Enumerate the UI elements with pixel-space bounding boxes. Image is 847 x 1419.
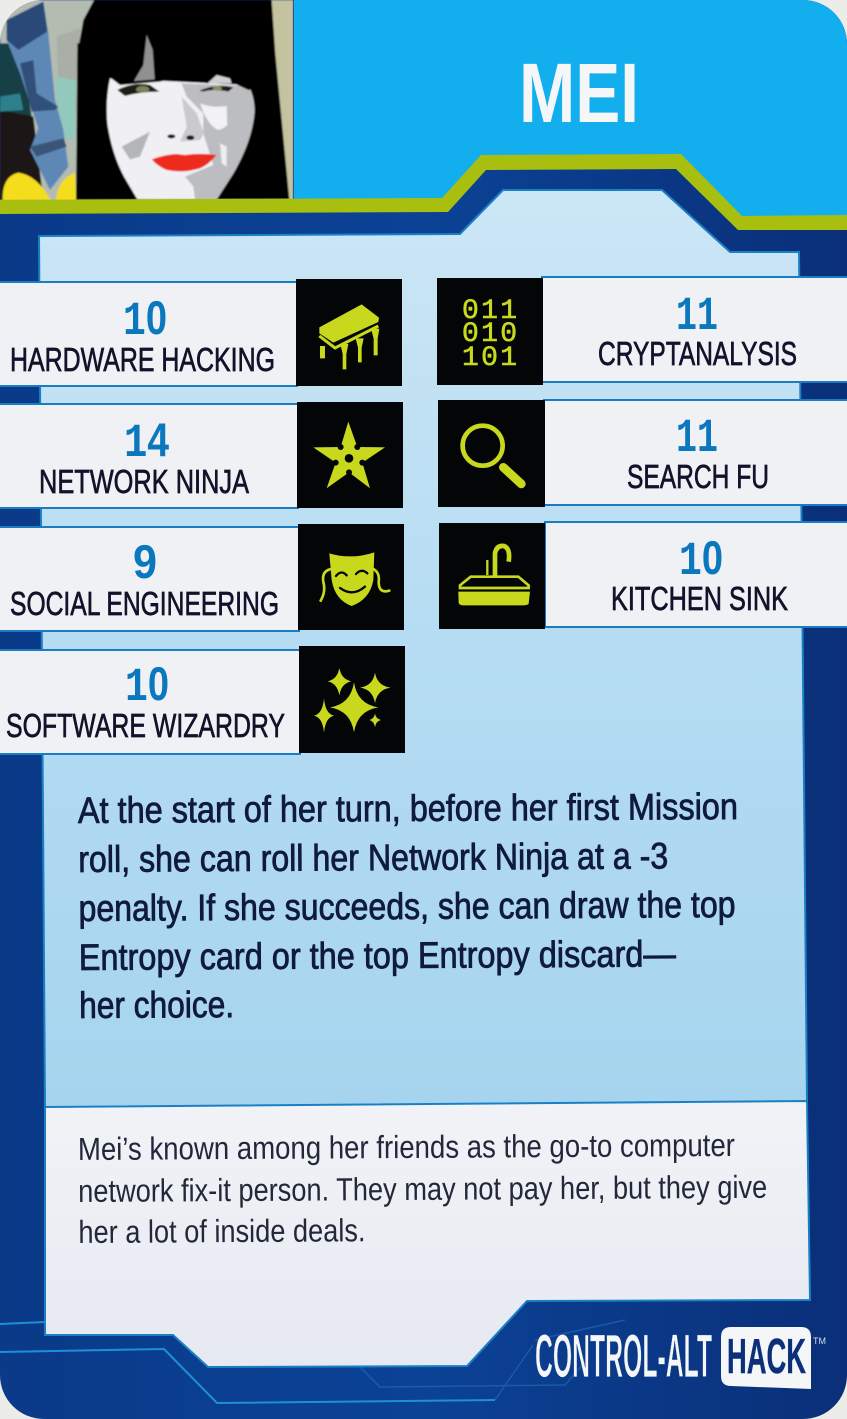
- stat: social engineering: [0, 524, 404, 631]
- icon: binary digits: 101: [462, 343, 517, 374]
- ability text: penalty. If she succeeds, she can draw the top: [78, 884, 736, 929]
- stat: software wizardry: SOFTWARE WIZARDRY: [6, 707, 285, 744]
- ability text: At the start of her turn, before her first Mission: [78, 786, 738, 831]
- stat: software wizardry: 10: [125, 657, 169, 715]
- stat: cryptanalysis: [437, 277, 847, 385]
- stat: network ninja: NETWORK NINJA: [39, 463, 249, 500]
- green swoosh band: [0, 154, 847, 230]
- ability text: her choice.: [79, 984, 234, 1026]
- stat: kitchen sink: 10: [679, 531, 723, 589]
- flavor text: [80, 1134, 766, 1244]
- light blue main panel: [39, 190, 807, 1108]
- ability text: Entropy card or the top Entropy discard—: [79, 933, 676, 978]
- white flavor panel: [45, 1101, 810, 1367]
- stat: cryptanalysis: 11: [676, 291, 718, 344]
- ability text: [78, 786, 739, 1026]
- stat: software wizardry: [0, 646, 405, 754]
- icon: magnifying glass: [463, 426, 521, 484]
- icon: theatre mask: [321, 552, 389, 606]
- portrait of Mei: [0, 0, 293, 201]
- icon: sink: [458, 546, 530, 605]
- stat: search fu: [438, 400, 847, 507]
- stat: kitchen sink: KITCHEN SINK: [611, 580, 788, 617]
- stat: search fu: 11: [676, 413, 718, 466]
- stat: kitchen sink: [439, 522, 847, 629]
- stat: hardware hacking: HARDWARE HACKING: [10, 341, 275, 378]
- logo: Control-Alt-Hack: TM: [813, 1336, 826, 1346]
- stat: social engineering: SOCIAL ENGINEERING: [10, 585, 279, 622]
- icon: ninja star: [313, 422, 385, 488]
- icon: binary digits: 010: [462, 319, 517, 350]
- stat: network ninja: [0, 402, 403, 508]
- stat: search fu: SEARCH FU: [627, 458, 769, 495]
- icon: chip: [319, 304, 379, 369]
- circuit lines: [0, 1320, 625, 1403]
- ability text: roll, she can roll her Network Ninja at a -3: [78, 835, 668, 880]
- header blue panel: [294, 0, 847, 217]
- stat: social engineering: 9: [133, 535, 157, 588]
- icon: binary digits: 011: [462, 296, 517, 327]
- icon: binary digits: [463, 299, 516, 366]
- flavor text: Mei’s known among her friends as the go-to computer: [78, 1127, 735, 1167]
- character name: MEI: [519, 46, 639, 140]
- stat: hardware hacking: [0, 279, 402, 386]
- flavor text: her a lot of inside deals.: [78, 1212, 366, 1250]
- stat: hardware hacking: 10: [123, 291, 167, 349]
- icon: sparkles: [314, 668, 391, 733]
- stat: network ninja: 14: [124, 413, 169, 471]
